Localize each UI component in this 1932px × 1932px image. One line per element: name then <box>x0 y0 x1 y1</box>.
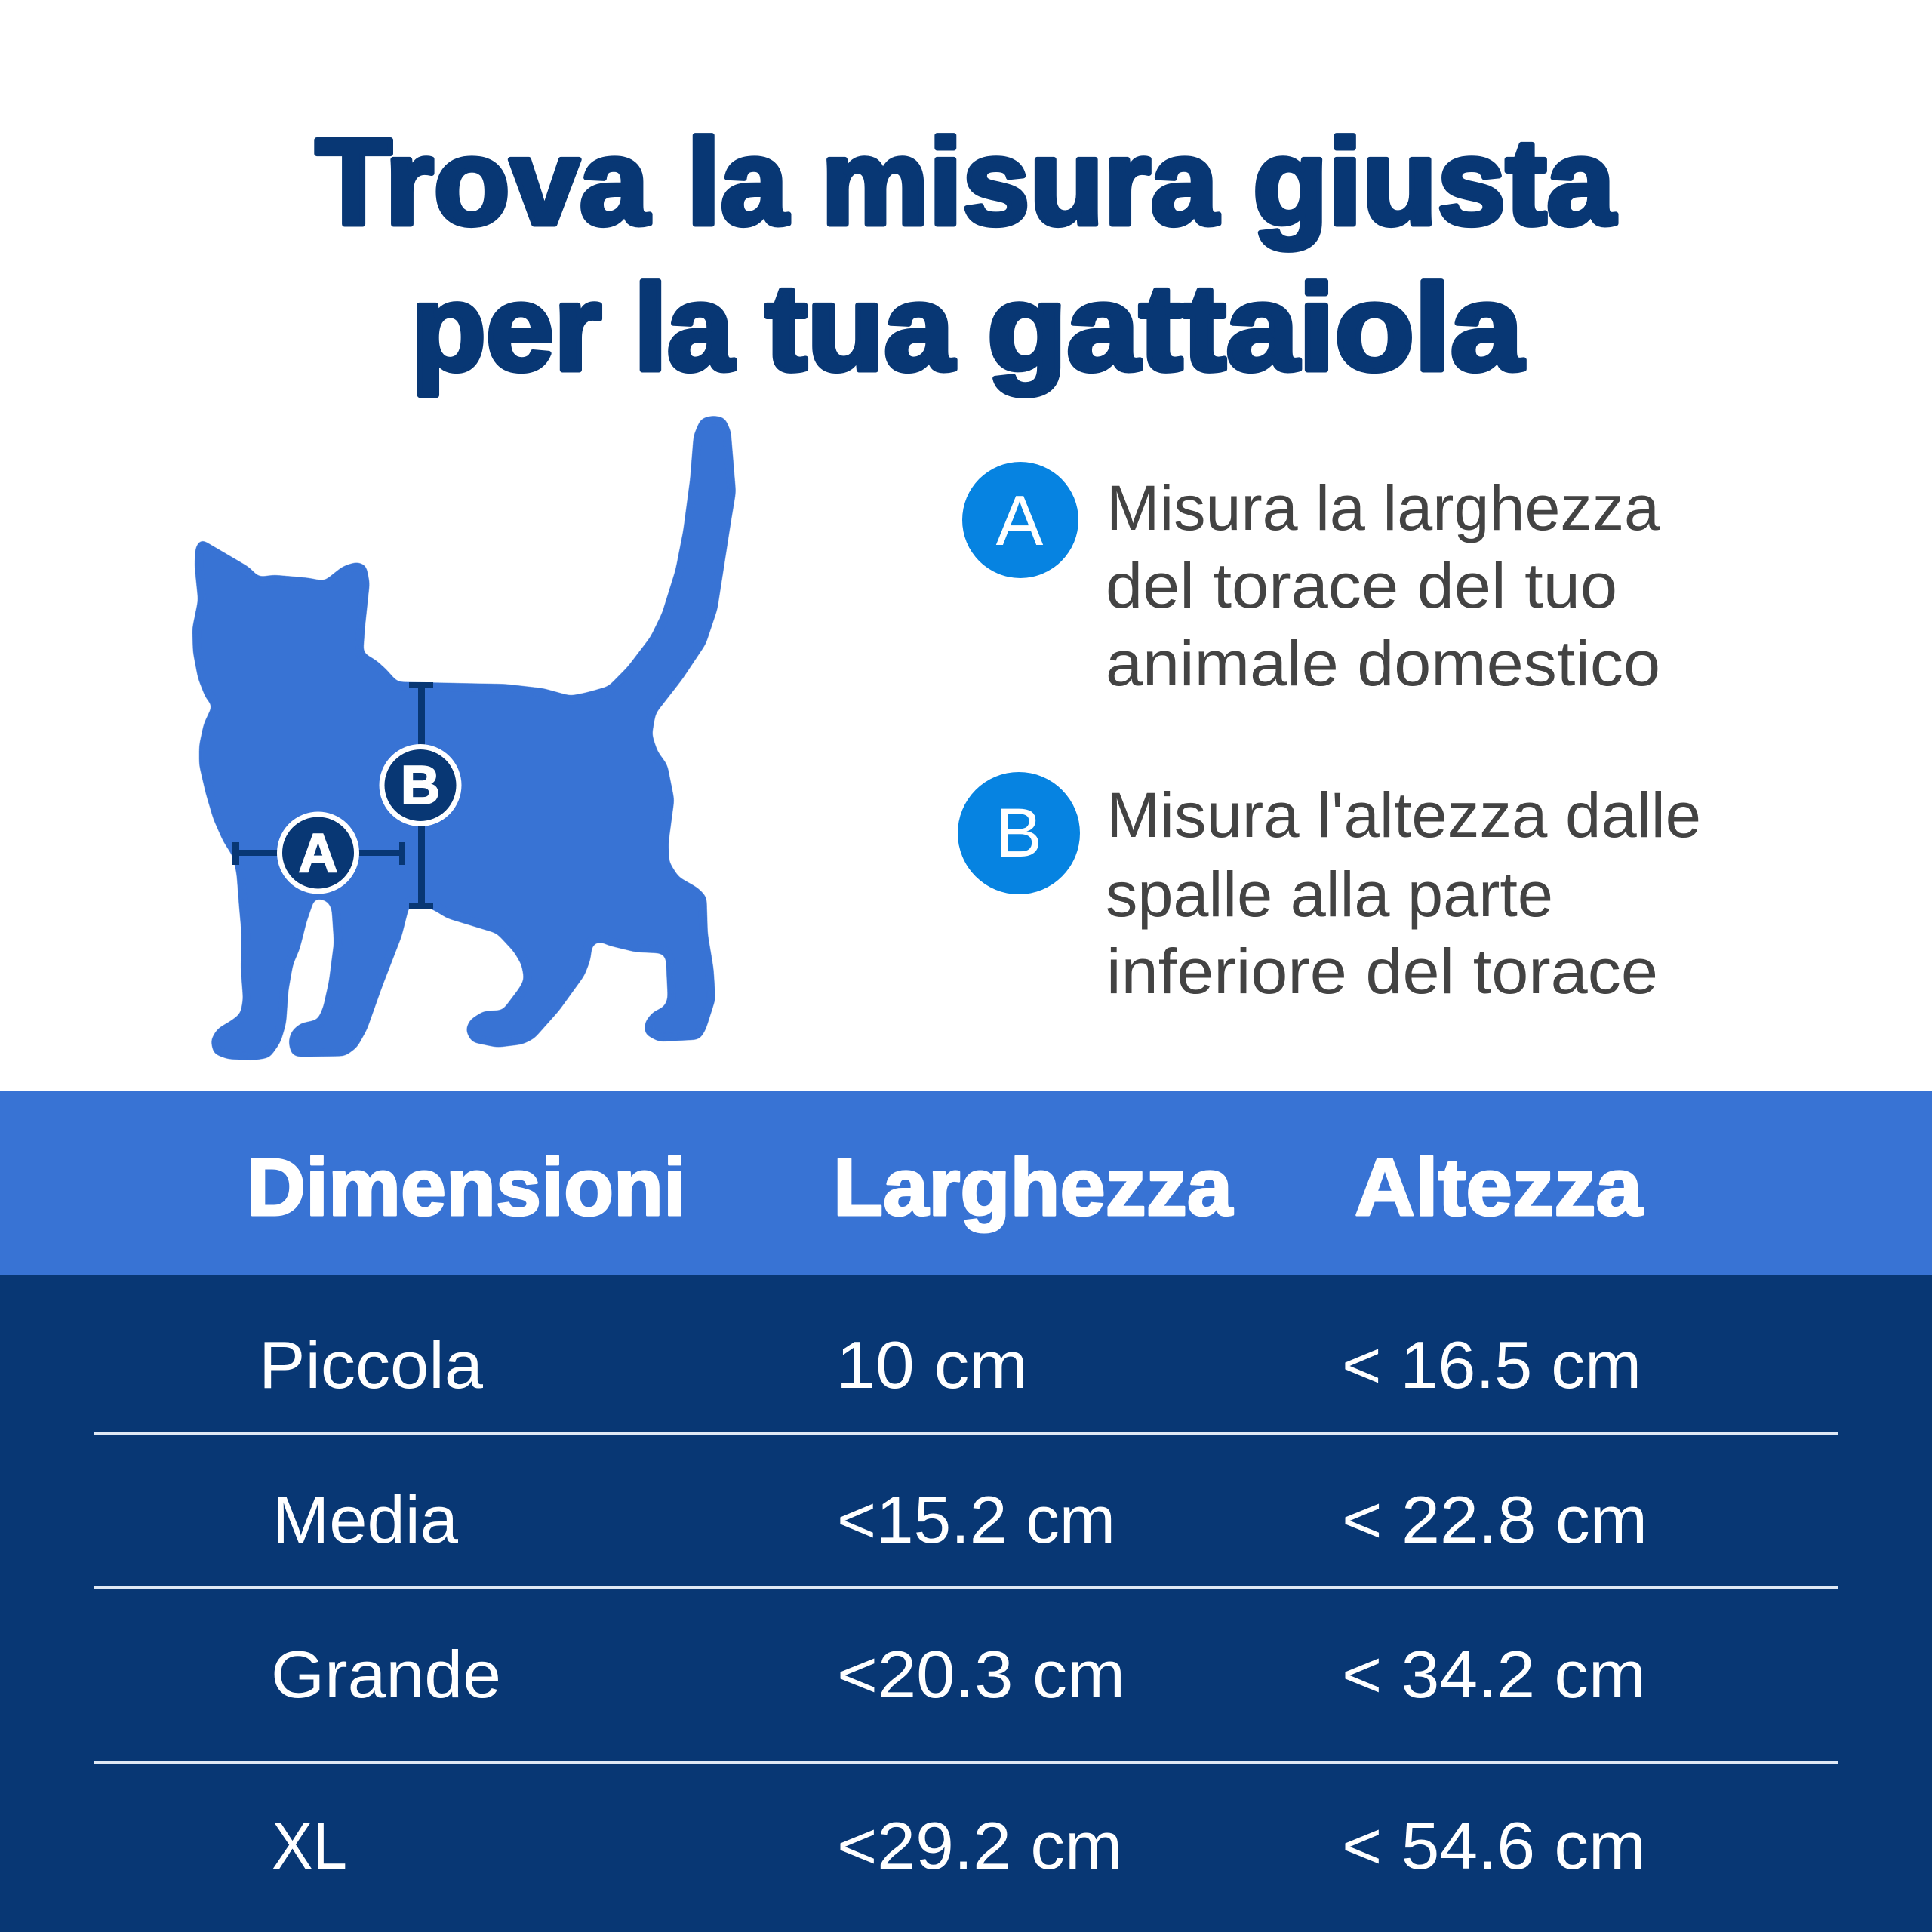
table header: Altezza <box>1355 1141 1643 1232</box>
row: Media: Media <box>272 1482 458 1557</box>
row: XL: <29.2 cm <box>837 1808 1122 1883</box>
row: Piccola: < 16.5 cm <box>1342 1327 1641 1402</box>
row: Media <box>272 1482 1647 1557</box>
row: Piccola <box>259 1327 1641 1402</box>
text: instruction B <box>1106 780 1701 1007</box>
instruction B <box>958 772 1701 1007</box>
row: XL <box>272 1808 1646 1883</box>
icon: badge A <box>962 462 1078 578</box>
measure line B <box>409 682 433 909</box>
table <box>0 1091 1932 1932</box>
cat silhouette <box>193 417 735 1060</box>
marker B: B <box>401 755 440 816</box>
table header: Dimensioni <box>247 1141 686 1232</box>
icon: badge A: A <box>996 481 1044 560</box>
table body <box>0 1275 1932 1932</box>
row: Piccola: 10 cm <box>836 1327 1028 1402</box>
table header <box>0 1091 1932 1275</box>
row: XL: < 54.6 cm <box>1342 1808 1646 1883</box>
title: Trova <box>315 114 651 251</box>
text: instruction B: spalle alla parte <box>1106 859 1553 930</box>
title: giusta <box>1253 114 1617 251</box>
instruction A <box>962 462 1660 699</box>
title: per <box>411 260 601 396</box>
row: Media: < 22.8 cm <box>1342 1482 1647 1557</box>
text: instruction A: animale domestico <box>1106 628 1660 699</box>
title: misura <box>821 114 1220 251</box>
icon: badge B <box>958 772 1080 894</box>
text: instruction B: inferiore del torace <box>1106 936 1658 1007</box>
row: Grande <box>271 1637 1646 1712</box>
title: gattaiola <box>987 260 1524 396</box>
text: instruction A: del torace del tuo <box>1106 550 1617 621</box>
marker B <box>382 747 459 824</box>
row: Grande: Grande <box>271 1637 501 1712</box>
marker A <box>279 814 356 891</box>
text: instruction B: Misura l'altezza dalle <box>1106 780 1701 851</box>
title <box>315 114 1617 396</box>
row: Media: <15.2 cm <box>837 1482 1115 1557</box>
row: XL: XL <box>272 1808 347 1883</box>
icon: badge B: B <box>995 795 1042 872</box>
cat diagram with measurements <box>193 417 735 1060</box>
text: instruction A <box>1106 472 1660 699</box>
marker A: A <box>299 823 338 884</box>
table header: Larghezza <box>833 1141 1233 1232</box>
row: Grande: <20.3 cm <box>837 1637 1125 1712</box>
title: la <box>634 260 735 396</box>
title: tua <box>765 260 955 396</box>
text: instruction A: Misura la larghezza <box>1106 472 1660 543</box>
row: Grande: < 34.2 cm <box>1342 1637 1646 1712</box>
title: la <box>687 114 789 251</box>
row: Piccola: Piccola <box>259 1327 483 1402</box>
measure line A <box>232 842 405 865</box>
